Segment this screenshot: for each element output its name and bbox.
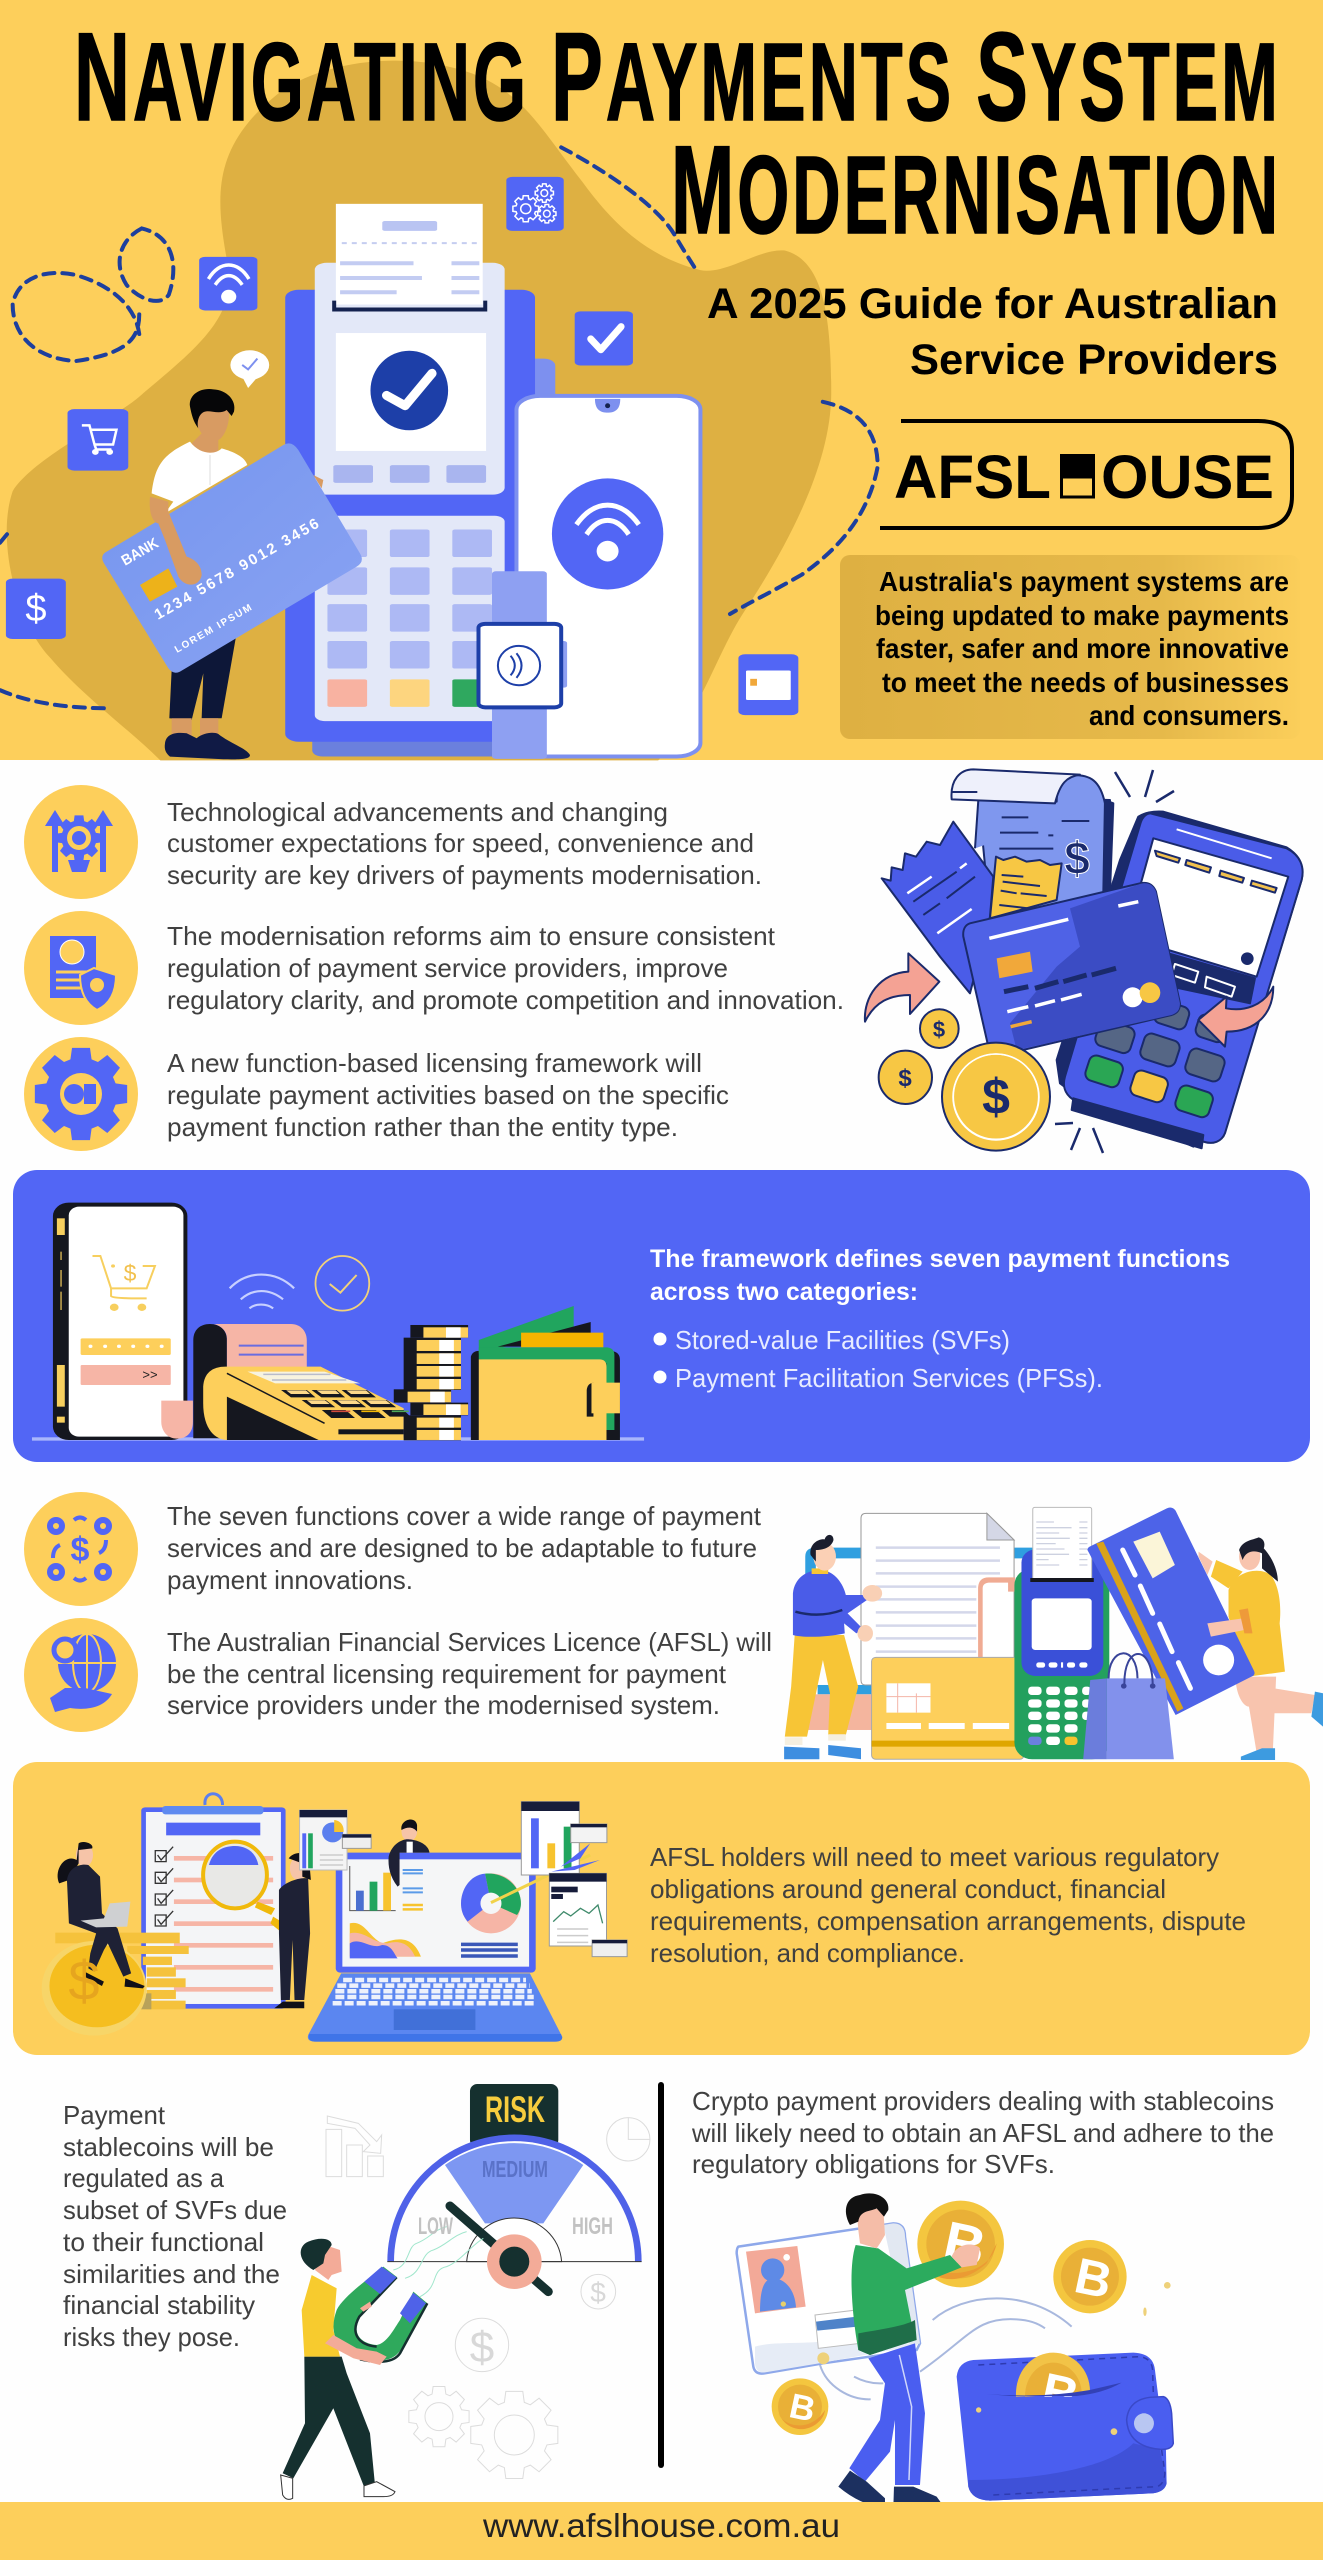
text: seven functions: [167, 1501, 762, 1595]
text: AFSL requirement: The Australian Financial Services Licence (AFSL) will: [167, 1627, 772, 1657]
person: [838, 2193, 980, 2508]
logo: OUSE: [1101, 443, 1274, 511]
shopping bag: [1083, 1653, 1174, 1759]
gauge labels: MEDIUM: [482, 2156, 548, 2182]
icon: gears: [506, 177, 564, 231]
person holding card: [102, 389, 362, 759]
seated woman: [58, 1842, 145, 1988]
floating report cards: [300, 1802, 627, 1957]
faint dollar signs: $: [470, 2323, 494, 2372]
panel: crypto providers: [691, 2086, 1274, 2508]
callout: faster, safer and more innovative: [876, 633, 1289, 664]
text: licensing framework: A new function-based licensing framework will: [167, 1048, 702, 1078]
text: reforms: regulation of payment service providers, improve: [167, 953, 728, 983]
presenter: [388, 1820, 430, 1887]
panel: seven payment functions: [13, 1170, 1310, 1462]
text: payment stablecoins: similarities and the: [63, 2259, 280, 2289]
logo: [880, 421, 1292, 528]
terminal: [285, 204, 555, 756]
person right: [1199, 1537, 1323, 1760]
icon: payment flows: [24, 1492, 138, 1606]
icon: cart: [68, 409, 128, 471]
icon: dollar sign: $: [25, 588, 47, 630]
terminal body: [1057, 811, 1303, 1148]
text: drivers: customer expectations for speed, convenience and: [167, 828, 754, 858]
text: reforms: regulatory clarity, and promote competition and innovation.: [167, 985, 844, 1015]
text: licensing framework: payment function rather than the entity type.: [167, 1112, 678, 1142]
illustration: payment terminal, card and coins: [865, 769, 1303, 1153]
phone labels: >>: [142, 1367, 158, 1382]
text: licensing framework: regulate payment activities based on the specific: [167, 1080, 729, 1110]
text: framework: The framework defines seven payment functions: [650, 1245, 1230, 1273]
risk tag: [470, 2084, 558, 2147]
illustration: payment terminal, card and coins: $: [898, 1065, 912, 1092]
laptop: [308, 1853, 590, 2042]
text: reforms: [167, 921, 844, 1015]
panel: functions and AFSL: [24, 1492, 1323, 1760]
text: seven functions: services and are designed to be adaptable to future: [167, 1533, 757, 1563]
callout: and consumers.: [1089, 700, 1289, 731]
faint background icons: [326, 2116, 650, 2478]
panel: AFSL obligations: [13, 1762, 1310, 2055]
receipt and POS terminal: [161, 1324, 410, 1440]
wallet: [957, 2353, 1173, 2501]
text: seven functions: The seven functions cover a wide range of payment: [167, 1501, 762, 1531]
faint dollar signs: [470, 2277, 606, 2372]
panel: hero: [0, 0, 1323, 760]
icon: globe in hand: [24, 1618, 138, 1732]
text: payment stablecoins: [63, 2100, 287, 2352]
subtitle: [707, 280, 1278, 384]
card text: BANK: [118, 535, 162, 569]
smartphone: [516, 396, 700, 756]
coins: B: [786, 2386, 819, 2430]
speech bubble: [230, 350, 269, 388]
icon: dollar tile: [6, 579, 66, 639]
icon: payment card tile: [738, 654, 798, 715]
text: AFSL requirement: be the central licensing requirement for payment: [167, 1659, 727, 1689]
wallet: B: [1037, 2362, 1084, 2424]
title: [74, 8, 1281, 260]
text: payment stablecoins: subset of SVFs due: [63, 2195, 287, 2225]
faint dollar signs: $: [590, 2277, 606, 2308]
callout: [840, 555, 1300, 739]
coin dollar sign: $: [68, 1949, 100, 2012]
coin stack: [394, 1325, 468, 1440]
coin and steps: [42, 1933, 189, 2036]
smartwatch: [478, 571, 567, 759]
illustration: risk gauge and man with magnet: [281, 2084, 650, 2499]
illustration: payment terminal, card and coins: $: [933, 1017, 945, 1042]
clipboard: [141, 1794, 295, 2009]
subtitle: A 2025 Guide for Australian: [707, 280, 1278, 328]
footer: www.afslhouse.com.au: [482, 2507, 840, 2544]
arrows: [865, 953, 1273, 1047]
text: framework: across two categories:: [650, 1278, 918, 1306]
text: crypto providers: regulatory obligations for SVFs.: [692, 2149, 1055, 2179]
phone: [53, 1203, 187, 1440]
swoosh lines: [820, 2298, 1072, 2399]
text: obligations: [650, 1842, 1246, 1968]
wallet: [471, 1306, 620, 1440]
coins: B: [938, 2210, 991, 2280]
text: payment stablecoins: Payment: [63, 2100, 166, 2130]
coins: [879, 1009, 1050, 1151]
text: drivers: security are key drivers of payments modernisation.: [167, 860, 762, 890]
icon: gear coins: [24, 1037, 138, 1151]
text: payment stablecoins: risks they pose.: [63, 2322, 240, 2352]
gauge labels: LOW: [418, 2213, 453, 2240]
text: reforms: The modernisation reforms aim to ensure consistent: [167, 921, 776, 951]
icon: check: [575, 311, 633, 365]
wifi and check: [230, 1256, 369, 1311]
callout: Australia's payment systems are: [879, 566, 1289, 597]
card: [963, 883, 1180, 1055]
identity card: [737, 2223, 920, 2374]
text: drivers: Technological advancements and changing: [167, 797, 668, 827]
text: crypto providers: [691, 2086, 1274, 2179]
text: drivers: [167, 797, 762, 890]
icon: lightbulb gear: [24, 785, 138, 899]
text: framework: Stored-value Facilities (SVFs): [675, 1325, 1010, 1355]
text: obligations: resolution, and compliance.: [650, 1938, 965, 1968]
text: payment stablecoins: financial stability: [63, 2290, 255, 2320]
man with magnet: [281, 2239, 427, 2499]
illustration: payment terminal, card and coins: $: [1064, 832, 1090, 884]
hero illustration: [0, 61, 878, 760]
illustration: crypto person with wallet: [737, 2193, 1173, 2508]
coins: B: [1070, 2247, 1117, 2310]
phone labels: $: [124, 1260, 137, 1286]
card text: 1234 5678 9012 3456: [152, 515, 322, 623]
subtitle: Service Providers: [910, 336, 1278, 384]
text: obligations: requirements, compensation arrangements, dispute: [650, 1906, 1246, 1936]
text: payment stablecoins: to their functional: [63, 2227, 264, 2257]
icon: wifi: [199, 257, 257, 310]
text: obligations: obligations around general conduct, financial: [650, 1874, 1166, 1904]
standing woman: [274, 1853, 311, 2008]
logo: AFSL: [894, 443, 1051, 511]
card text: LOREM IPSUM: [173, 603, 254, 656]
illustration: payment terminal, card and coins: $: [982, 1069, 1010, 1125]
text: payment stablecoins: regulated as a: [63, 2163, 225, 2193]
text: payment stablecoins: stablecoins will be: [63, 2132, 274, 2162]
text: AFSL requirement: [167, 1627, 772, 1720]
yellow card: [872, 1657, 1024, 1759]
card text: [118, 515, 322, 656]
gauge labels: [418, 2089, 613, 2240]
panel: stablecoins: [63, 2082, 664, 2499]
illustration: phone, POS, coins and wallet: [32, 1203, 644, 1441]
text: seven functions: payment innovations.: [167, 1565, 413, 1595]
back frame: [805, 1548, 1038, 1730]
text: framework: [650, 1245, 1230, 1393]
panel: drivers: [24, 769, 1303, 1153]
receipt: [882, 769, 1113, 993]
blue card: [1087, 1508, 1255, 1715]
text: framework: Payment Facilitation Services (PFSs).: [675, 1363, 1103, 1393]
illustration: people with documents and card: [784, 1507, 1323, 1760]
footer: [0, 2502, 1323, 2560]
text: crypto providers: will likely need to obtain an AFSL and adhere to the: [691, 2118, 1274, 2148]
gauge: [387, 2134, 642, 2297]
divider: [658, 2082, 664, 2468]
icon: document shield: [24, 911, 138, 1025]
text: licensing framework: [167, 1048, 729, 1142]
callout: to meet the needs of businesses: [882, 667, 1289, 698]
coins: [772, 2201, 1171, 2435]
text: obligations: AFSL holders will need to meet various regulatory: [650, 1842, 1219, 1872]
person left: [784, 1535, 882, 1759]
POS terminal: [1014, 1507, 1109, 1759]
text: crypto providers: Crypto payment providers dealing with stablecoins: [692, 2086, 1274, 2116]
illustration: compliance laptop and clipboard: [42, 1794, 627, 2042]
phone labels: [124, 1260, 158, 1382]
callout: being updated to make payments: [875, 600, 1289, 631]
document: [861, 1513, 1015, 1685]
text: AFSL requirement: service providers under the modernised system.: [167, 1690, 720, 1720]
gauge labels: HIGH: [572, 2213, 613, 2240]
icon: payment flows: $: [71, 1531, 90, 1569]
gauge labels: RISK: [485, 2089, 545, 2130]
